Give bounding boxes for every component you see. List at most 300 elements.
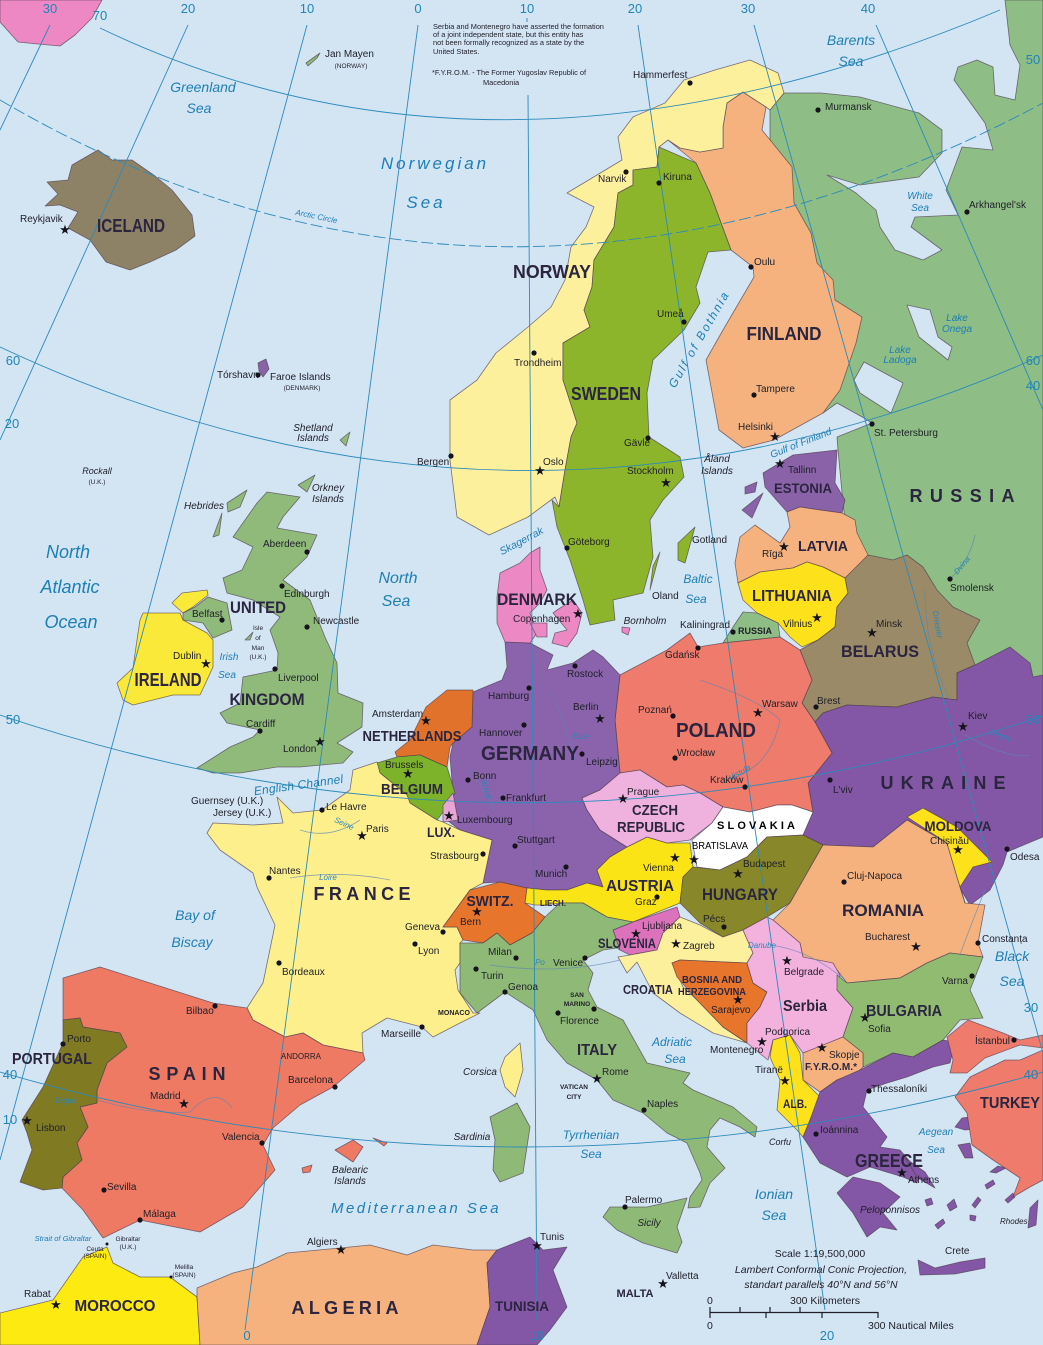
- city labels: Frankfurt: [506, 793, 546, 804]
- island: Lesbos: [955, 1117, 985, 1130]
- city labels: Wrocław: [677, 748, 716, 759]
- sea labels: Lake: [946, 313, 968, 324]
- scale and projection note: 300 Nautical Miles: [868, 1320, 954, 1332]
- island: Sardinia: [490, 1103, 530, 1182]
- city labels: St. Petersburg: [874, 428, 938, 439]
- graticule labels: 20: [820, 1328, 834, 1343]
- note: Serbia and Montenegro: Serbia and Montenegro have asserted the formation: [433, 22, 604, 31]
- country: Italy: [460, 903, 757, 1208]
- city labels: Bilbao: [186, 1006, 214, 1017]
- scale and projection note: Lambert Conformal Conic Projection,: [735, 1264, 907, 1276]
- sea labels: Sea: [685, 592, 707, 606]
- islands: Gotland and Oland: [650, 527, 695, 590]
- country: Slovenia: [613, 907, 680, 955]
- country labels: GREECE: [855, 1151, 923, 1171]
- country labels: ALGERIA: [292, 1298, 398, 1318]
- graticule labels: 20: [5, 416, 19, 431]
- city labels: Barcelona: [288, 1075, 333, 1086]
- italic island labels: Islands: [701, 466, 733, 477]
- city labels: Hannover: [479, 728, 523, 739]
- country labels: BULGARIA: [866, 1003, 942, 1020]
- graticule labels: 20: [181, 1, 195, 16]
- region: Northern Ireland: [183, 597, 232, 638]
- scale and projection note: 0: [707, 1295, 713, 1307]
- small labels: ANDORRA: [281, 1052, 322, 1061]
- country: Germany: [443, 642, 627, 890]
- country labels: SLOVENIA: [598, 935, 656, 951]
- graticule labels: 10: [530, 1328, 544, 1343]
- capital stars: ★: [59, 222, 71, 237]
- italic island labels: Corfu: [769, 1137, 791, 1147]
- city labels: Hamburg: [488, 691, 529, 702]
- capital stars: ★: [630, 926, 642, 941]
- capital stars: ★: [572, 606, 584, 621]
- city labels: Tórshavn: [217, 370, 259, 381]
- city labels: Chișinău: [930, 836, 969, 847]
- capital stars: ★: [670, 936, 682, 951]
- country: F.Y.R.O.M.: [803, 1037, 863, 1092]
- sea labels: Tyrrhenian: [563, 1128, 620, 1142]
- capital stars: ★: [752, 705, 764, 720]
- small labels: MARINO: [564, 1001, 590, 1008]
- graticule labels: 40: [3, 1067, 17, 1082]
- city labels: Liverpool: [278, 673, 319, 684]
- small labels: SAN: [570, 992, 584, 999]
- country: Estonia: [763, 450, 845, 513]
- islands: Balearic: [302, 1138, 387, 1173]
- city labels: Budapest: [743, 859, 785, 870]
- city labels: Sevilla: [107, 1182, 137, 1193]
- country: Portugal: [20, 1018, 127, 1190]
- city labels: Valencia: [222, 1132, 260, 1143]
- river labels: [54, 554, 1014, 1105]
- city labels: Kiev: [968, 711, 987, 722]
- sea labels: Sea: [839, 53, 864, 69]
- city labels: Skopje: [829, 1050, 860, 1061]
- country labels: KINGDOM: [230, 690, 304, 709]
- capital stars: ★: [769, 429, 781, 444]
- country labels: AUSTRIA: [606, 878, 674, 895]
- city labels: Oulu: [754, 257, 775, 268]
- country labels: POLAND: [676, 720, 756, 742]
- city labels: Geneva: [405, 922, 440, 933]
- city labels: Pécs: [703, 914, 725, 925]
- graticule labels: 30: [741, 1, 755, 16]
- country: Turkey (Europe): [947, 1020, 1043, 1073]
- city labels: Bern: [460, 917, 481, 928]
- city labels: Málaga: [143, 1209, 176, 1220]
- capital stars: ★: [688, 852, 700, 867]
- country: Bosnia and Herzegovina: [672, 960, 767, 1043]
- country labels: ITALY: [577, 1042, 617, 1059]
- river labels: Elbe: [573, 732, 590, 741]
- sea labels: Adriatic: [651, 1035, 692, 1049]
- city labels: Gävle: [624, 438, 651, 449]
- country labels: SWEDEN: [571, 384, 641, 404]
- sea labels: Gulf of Finland: [769, 426, 834, 461]
- city labels: Dublin: [173, 651, 201, 662]
- sea labels: Sea: [762, 1207, 787, 1223]
- italic island labels: Sicily: [637, 1218, 662, 1229]
- sea labels: Sea: [382, 593, 410, 610]
- italic island labels: Sardinia: [454, 1132, 491, 1143]
- italic island labels: Bornholm: [624, 616, 666, 627]
- lake: Ladoga: [854, 362, 903, 413]
- small labels: Ceuta: [86, 1246, 104, 1253]
- sea labels: Lake: [889, 345, 911, 356]
- river labels: Danube: [748, 941, 777, 950]
- capital stars: ★: [657, 1276, 669, 1291]
- city labels: Ljubljana: [642, 921, 682, 932]
- region: Donegal: [172, 590, 208, 613]
- city labels: Lisbon: [36, 1123, 65, 1134]
- sea labels: Sea: [927, 1145, 945, 1156]
- capital stars: ★: [531, 1238, 543, 1253]
- country: Belarus: [800, 555, 980, 722]
- capital stars: ★: [660, 475, 672, 490]
- city labels: İstanbul: [975, 1034, 1010, 1047]
- italic island labels: [184, 423, 920, 1229]
- city labels: Minsk: [876, 619, 903, 630]
- country labels: LIECH.: [540, 899, 566, 908]
- country: Switzerland: [443, 882, 545, 945]
- country: Slovakia: [692, 805, 813, 870]
- country labels: GERMANY: [481, 743, 580, 765]
- capital stars: ★: [779, 1073, 791, 1088]
- sea labels: Greenland: [170, 79, 237, 95]
- small labels: Man: [252, 645, 265, 652]
- city labels: Smolensk: [950, 583, 995, 594]
- capital stars: ★: [896, 1165, 908, 1180]
- city labels: Rhodes: [1000, 1217, 1028, 1226]
- city labels: Lyon: [418, 946, 439, 957]
- city labels: Narvik: [598, 174, 627, 185]
- city labels: Naples: [647, 1099, 678, 1110]
- country labels: NORWAY: [513, 262, 591, 282]
- country labels: F.Y.R.O.M.*: [805, 1062, 857, 1073]
- city labels: Jan Mayen: [325, 49, 374, 60]
- city labels: Kaliningrad: [680, 620, 730, 631]
- note: Serbia and Montenegro: United States.: [433, 47, 479, 56]
- city labels: Stuttgart: [517, 835, 555, 846]
- city labels: Tunis: [540, 1232, 564, 1243]
- country: Greece: [803, 1040, 955, 1183]
- small labels: MONACO: [438, 1010, 470, 1017]
- islands: Faroe: [258, 359, 269, 377]
- city labels: Rabat: [24, 1289, 51, 1300]
- note: Serbia and Montenegro: *F.Y.R.O.M. - The Former Yugoslav Republic of: [432, 68, 587, 77]
- country: Norway: [450, 60, 784, 535]
- islands: Hebrides, Orkney, Shetland, Man: [213, 432, 350, 640]
- country: Lithuania: [738, 562, 848, 647]
- city labels: Arkhangel'sk: [969, 200, 1027, 211]
- city labels: Odesa: [1010, 852, 1040, 863]
- country: Romania: [773, 820, 985, 983]
- sea labels: Ionian: [755, 1186, 793, 1202]
- country labels: BELGIUM: [381, 781, 443, 798]
- capital stars: ★: [335, 1242, 347, 1257]
- graticule labels: 40: [1026, 378, 1040, 393]
- scale and projection note: Scale 1:19,500,000: [775, 1248, 865, 1260]
- country labels: ALB.: [783, 1097, 807, 1111]
- capital stars: ★: [669, 850, 681, 865]
- city labels: Aberdeen: [263, 539, 306, 550]
- italic island labels: Peloponnisos: [860, 1205, 920, 1216]
- scale and projection note: 0: [707, 1320, 713, 1332]
- city labels: Göteborg: [568, 537, 610, 548]
- small labels: (SPAIN): [172, 1272, 196, 1279]
- country labels: Serbia: [783, 998, 827, 1015]
- scale and projection note: [707, 1248, 954, 1332]
- country labels: BRATISLAVA: [692, 841, 748, 852]
- country labels: MOROCCO: [74, 1298, 156, 1315]
- country: Russia: [770, 0, 1043, 700]
- graticule labels: 60: [1026, 353, 1040, 368]
- islands: Cyclades: [925, 1166, 1015, 1229]
- city labels: Tallinn: [788, 465, 816, 476]
- country labels: DENMARK: [497, 590, 578, 609]
- country labels: NETHERLANDS: [362, 728, 462, 745]
- country: Netherlands: [395, 690, 473, 767]
- islands: Saaremaa and Hiiumaa: [742, 482, 763, 518]
- city labels: Munich: [535, 869, 567, 880]
- city labels: Reykjavik: [20, 214, 64, 225]
- island: Funen: [530, 623, 547, 637]
- sea labels: Barents: [827, 32, 875, 48]
- graticule labels: 30: [43, 1, 57, 16]
- graticule labels: 50: [1026, 52, 1040, 67]
- city labels: Porto: [67, 1034, 91, 1045]
- country labels: TUNISIA: [495, 1298, 549, 1314]
- city labels: Montenegro: [710, 1045, 764, 1056]
- sea labels: English Channel: [253, 772, 344, 798]
- city labels: Podgorica: [765, 1027, 810, 1038]
- graticule labels: 0: [243, 1328, 251, 1343]
- sea labels: Black: [995, 948, 1030, 964]
- scale and projection note: 300 Kilometers: [790, 1295, 860, 1307]
- city labels: Jersey (U.K.): [213, 808, 271, 819]
- island: Sicily: [603, 1198, 687, 1253]
- small labels: Rockall: [82, 466, 113, 476]
- city labels: Thessaloníki: [871, 1084, 927, 1095]
- capital stars: ★: [617, 791, 629, 806]
- country labels: ESTONIA: [774, 480, 832, 496]
- country labels: ICELAND: [97, 216, 165, 236]
- city labels: Gdańsk: [665, 650, 700, 661]
- city labels: Rīga: [762, 549, 784, 560]
- city labels: Sofia: [868, 1024, 891, 1035]
- city labels: Crete: [945, 1246, 970, 1257]
- city labels: Berlin: [573, 702, 599, 713]
- small labels: Melilla: [175, 1264, 194, 1271]
- city labels: Cardiff: [246, 719, 275, 730]
- city labels: Graz: [635, 897, 657, 908]
- island: Zealand: [552, 600, 582, 647]
- country: Greenland: [0, 0, 102, 46]
- country labels: MALTA: [616, 1288, 654, 1300]
- country: Morocco: [0, 1247, 200, 1345]
- country: Finland: [668, 92, 862, 448]
- city labels: Faroe Islands: [270, 372, 331, 383]
- river labels: Vistula: [727, 763, 753, 783]
- capital stars: ★: [732, 866, 744, 881]
- city labels: Newcastle: [313, 616, 360, 627]
- small labels: Isle: [253, 625, 263, 632]
- small labels: (SPAIN): [83, 1253, 107, 1260]
- country: Spain: [62, 967, 365, 1238]
- graticule labels: 70: [93, 8, 107, 23]
- city labels: Umeå: [657, 308, 684, 320]
- italic island labels: Islands: [312, 494, 344, 505]
- graticule labels: 10: [520, 1, 534, 16]
- city labels: Vilnius: [783, 619, 812, 630]
- italic island labels: Corsica: [463, 1067, 497, 1078]
- country: France: [207, 762, 492, 1053]
- sea labels: Sea: [218, 670, 236, 681]
- exclave: Kaliningrad: [723, 612, 780, 643]
- capital stars: [21, 222, 969, 1312]
- city labels: Hammerfest: [633, 70, 688, 81]
- capital stars: ★: [859, 1010, 871, 1025]
- capital stars: ★: [420, 713, 432, 728]
- graticule labels: 50: [6, 712, 20, 727]
- graticule labels: 60: [6, 353, 20, 368]
- city labels: Kiruna: [663, 172, 692, 183]
- country labels: FINLAND: [746, 324, 822, 344]
- country labels: ROMANIA: [842, 901, 924, 920]
- city labels: Le Havre: [326, 802, 367, 813]
- city labels: Madrid: [150, 1091, 181, 1102]
- small labels: (U.K.): [250, 654, 266, 661]
- city labels: Zagreb: [683, 941, 715, 952]
- river labels: Rhine: [479, 778, 494, 801]
- river labels: Seine: [333, 815, 356, 832]
- country: Moldova: [907, 808, 992, 903]
- sea labels: Irish: [220, 652, 239, 663]
- city labels: Tiranë: [755, 1065, 783, 1076]
- island: Chios: [958, 1143, 973, 1158]
- country: Hungary: [680, 835, 823, 937]
- capital stars: ★: [781, 953, 793, 968]
- city labels: Constanța: [982, 934, 1028, 945]
- graticule labels: 40: [861, 1, 875, 16]
- small labels: (U.K.): [120, 1244, 136, 1251]
- island: Corsica: [500, 1043, 523, 1097]
- city labels: Trondheim: [514, 358, 561, 369]
- city labels: Florence: [560, 1016, 599, 1027]
- country labels: CZECH: [632, 802, 678, 819]
- italic island labels: Hebrides: [184, 501, 224, 512]
- river labels: Dnipro: [988, 727, 1014, 744]
- city labels: Leipzig: [586, 757, 618, 768]
- graticule labels: 10: [300, 1, 314, 16]
- country labels: CROATIA: [623, 982, 674, 997]
- city labels: London: [283, 744, 316, 755]
- small labels: RUSSIA: [738, 626, 772, 636]
- country labels: HUNGARY: [702, 885, 779, 904]
- capital stars: ★: [778, 539, 790, 554]
- river labels: Tagus: [54, 1096, 76, 1105]
- sea labels: Mediterranean Sea: [331, 1200, 501, 1217]
- sea labels: Ladoga: [883, 355, 917, 366]
- city labels: Warsaw: [762, 699, 799, 710]
- graticule labels: 0: [414, 1, 422, 16]
- city labels: Belfast: [192, 609, 223, 620]
- small labels: VATICAN: [560, 1084, 588, 1091]
- city labels: Helsinki: [738, 422, 773, 433]
- country: Ireland: [117, 613, 213, 705]
- capital stars: ★: [443, 808, 455, 823]
- capital stars: ★: [314, 734, 326, 749]
- country: Bulgaria: [837, 953, 983, 1067]
- graticule labels: 10: [3, 1112, 17, 1127]
- capital stars: ★: [957, 719, 969, 734]
- rivers: [97, 535, 1030, 1112]
- country: Serbia: [743, 917, 853, 1060]
- capital stars: ★: [774, 456, 786, 471]
- sea labels: Onega: [942, 324, 972, 335]
- country labels: MOLDOVA: [924, 818, 992, 834]
- city labels: Strasbourg: [430, 851, 479, 862]
- country labels: LATVIA: [798, 538, 848, 555]
- capital stars: ★: [471, 904, 483, 919]
- island: Jan Mayen: [306, 53, 320, 66]
- note: Serbia and Montenegro: not been formally recognized as a state by the: [433, 38, 584, 47]
- city labels: Poznań: [638, 705, 672, 716]
- sea labels: Gulf of Bothnia: [665, 289, 732, 390]
- river labels: Dnieper: [931, 610, 944, 639]
- city labels: Turin: [481, 971, 503, 982]
- city labels: Luxembourg: [457, 815, 513, 826]
- city labels: Bonn: [473, 771, 496, 782]
- scale and projection note: standart parallels 40°N and 56°N: [744, 1279, 898, 1291]
- city labels: Oland: [652, 591, 679, 602]
- city labels: Cluj-Napoca: [847, 871, 902, 882]
- small labels: [82, 63, 772, 1279]
- city labels: Stockholm: [627, 466, 674, 477]
- city labels: Vienna: [643, 863, 674, 874]
- country: Luxembourg: [443, 793, 458, 822]
- island: Evia: [905, 1158, 935, 1188]
- sea labels: Norwegian: [381, 154, 489, 173]
- capital stars: ★: [756, 1034, 768, 1049]
- city labels: Bergen: [417, 457, 449, 468]
- city labels: Rostock: [567, 669, 604, 680]
- capital stars: ★: [866, 625, 878, 640]
- country: Turkey (Asia): [955, 1050, 1043, 1197]
- country: Latvia: [735, 507, 868, 583]
- capital stars: ★: [356, 828, 368, 843]
- country: Austria: [525, 837, 693, 922]
- sea labels: North: [378, 570, 418, 587]
- sea labels: Sea: [406, 193, 446, 212]
- sea labels: Aegean: [918, 1127, 954, 1138]
- graticule labels: 50: [1026, 712, 1040, 727]
- graticule labels: 20: [628, 1, 642, 16]
- italic island labels: Orkney: [312, 483, 345, 494]
- country: Sweden: [552, 147, 731, 625]
- sea labels: Strait of Gibraltar: [35, 1234, 92, 1243]
- small labels: (NORWAY): [335, 63, 367, 70]
- region: Peloponnisos: [837, 1177, 900, 1237]
- city labels: Guernsey (U.K.): [191, 796, 263, 807]
- country labels: LITHUANIA: [752, 588, 832, 605]
- city labels: Athens: [908, 1175, 939, 1186]
- italic island labels: Islands: [297, 433, 329, 444]
- city labels: Belgrade: [784, 967, 824, 978]
- city labels: Edinburgh: [284, 589, 330, 600]
- city labels: Amsterdam: [372, 709, 423, 720]
